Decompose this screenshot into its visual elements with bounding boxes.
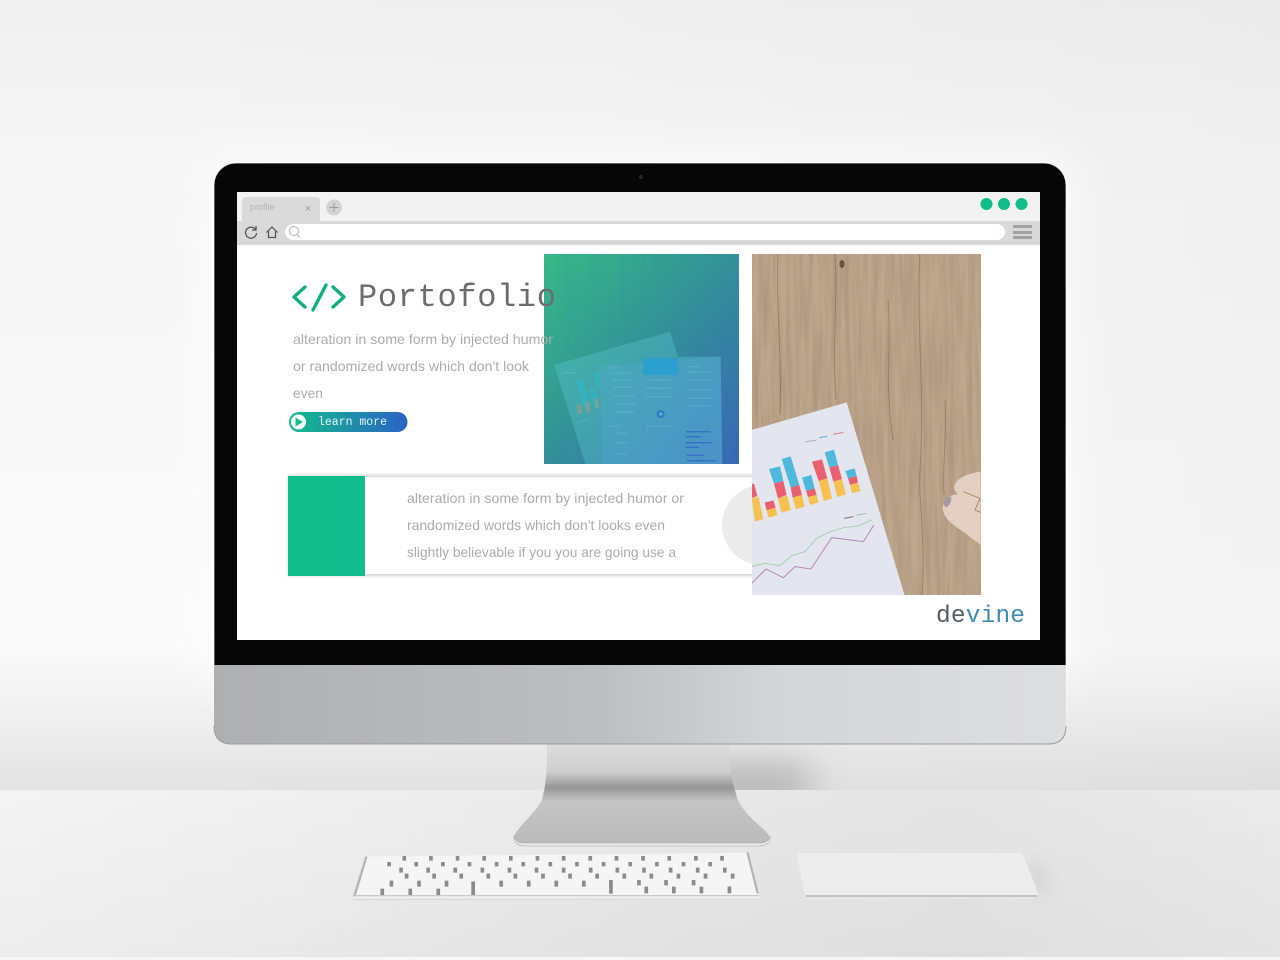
browser tab: profile [250,202,275,212]
keyboard [353,853,759,901]
learn more button: learn more [318,416,387,429]
icon: code brackets [294,285,344,310]
wood desk photo [752,254,981,597]
learn more button [289,412,408,432]
new tab button [326,200,342,216]
monitor body [214,163,1066,744]
icon: hand [943,472,981,545]
address bar [285,224,1005,240]
heading [294,279,556,316]
menu icon [1013,225,1032,239]
title: Portofolio [358,279,556,316]
key gaps [382,856,733,895]
monitor stand [514,744,770,846]
intro paragraph: or randomized words which don't look [293,358,530,374]
reload icon [246,226,256,238]
tinted papers [554,332,722,465]
grey circle [722,485,802,565]
card text: randomized words which don't looks even [407,517,665,533]
green block [288,476,365,576]
browser tab: × [305,203,311,215]
card text [407,490,684,560]
line chart [752,520,874,583]
window dots [980,198,1028,210]
devine logo: devine [936,603,1025,630]
chart legends [805,432,867,518]
home icon [266,227,278,238]
screen [237,192,1040,640]
paper with charts [752,402,981,597]
intro paragraph: even [293,385,323,401]
info card [288,475,802,576]
browser chrome [237,192,1040,245]
intro paragraph [293,331,553,401]
card text: alteration in some form by injected humor or [407,490,684,506]
stacked bar chart [752,450,861,522]
trackpad [797,853,1048,898]
tinted photo panel [544,254,739,465]
intro paragraph: alteration in some form by injected humor [293,331,553,347]
browser tab [242,197,320,221]
card text: slightly believable if you you are going use a [407,544,676,560]
